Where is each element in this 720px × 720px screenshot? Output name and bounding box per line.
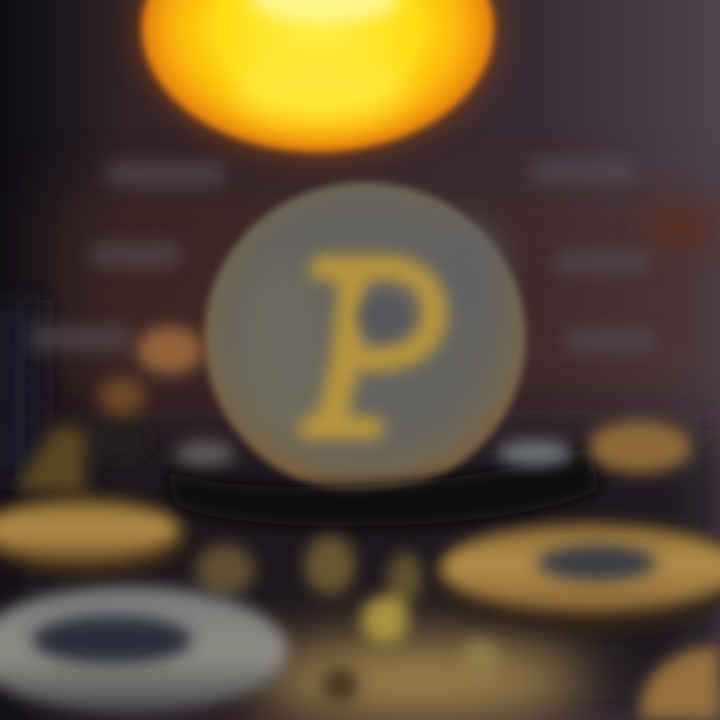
small gold coins at left — [15, 326, 203, 495]
coin — [204, 182, 526, 494]
left gold coin — [0, 497, 187, 573]
right large coin — [438, 524, 720, 630]
sun — [136, 0, 500, 158]
letter P — [310, 268, 435, 428]
small gold pieces center — [195, 535, 500, 703]
bottom right gold coin — [640, 646, 720, 720]
dark pedestal — [165, 440, 600, 526]
silver coin bottom left — [0, 586, 288, 714]
blurred label smudges — [30, 158, 655, 352]
right gold coin on pedestal — [588, 421, 692, 473]
